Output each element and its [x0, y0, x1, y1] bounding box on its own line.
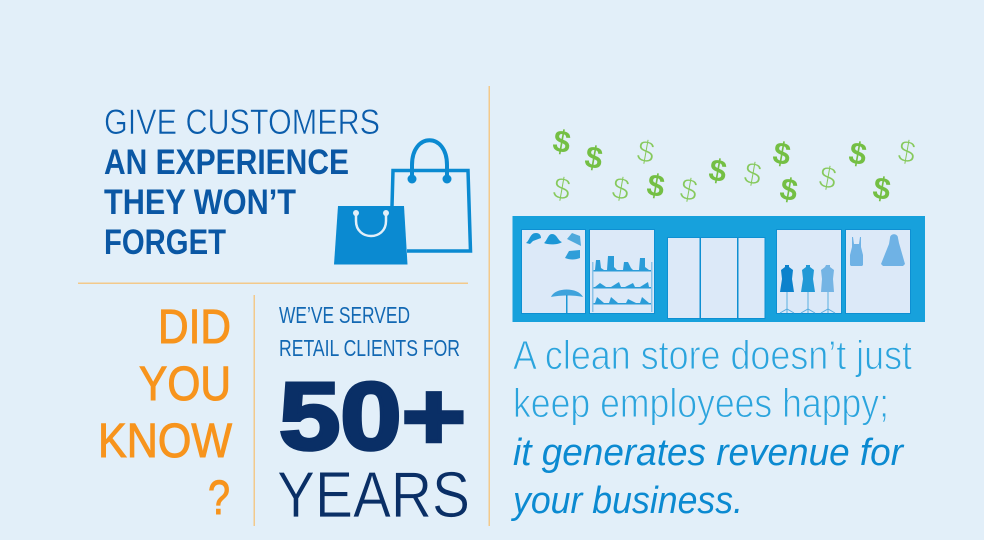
icon: floating dollar signs: [550, 123, 918, 208]
did you know: KNOW: [98, 415, 233, 468]
icon: floating dollar signs: $: [609, 170, 632, 207]
icon: floating dollar signs: $: [777, 171, 800, 208]
heading: give customers: GIVE CUSTOMERS: [104, 103, 380, 142]
did you know: DID: [158, 301, 231, 354]
stat: 50+ years: RETAIL CLIENTS FOR: [279, 335, 460, 361]
icon: floating dollar signs: $: [770, 135, 793, 172]
did you know: YOU: [139, 358, 231, 411]
icon: floating dollar signs: $: [677, 171, 700, 208]
icon: floating dollar signs: $: [582, 139, 605, 176]
storefront: [512, 216, 925, 322]
icon: floating dollar signs: $: [816, 159, 839, 196]
icon: floating dollar signs: $: [634, 133, 657, 170]
icon: floating dollar signs: $: [644, 167, 667, 204]
tagline: it generates revenue for: [513, 432, 904, 474]
icon: hats and umbrella: [526, 233, 583, 313]
tagline: keep employees happy;: [513, 380, 889, 426]
icon: floating dollar signs: $: [870, 170, 893, 207]
icon: shoe shelves: [592, 256, 652, 312]
heading: give customers: AN EXPERIENCE: [104, 143, 349, 182]
did you know: [98, 301, 233, 525]
stat: 50+ years: 50+: [279, 363, 466, 470]
icon: floating dollar signs: $: [550, 123, 573, 160]
icon: floating dollar signs: $: [846, 135, 869, 172]
tagline: [510, 332, 913, 522]
tagline: A clean store doesn’t just: [513, 332, 913, 378]
icon: dresses: [850, 234, 905, 266]
icon: floating dollar signs: $: [895, 133, 918, 170]
icon: shopping bags: [334, 140, 470, 264]
heading: give customers: FORGET: [104, 223, 226, 262]
icon: floating dollar signs: $: [706, 152, 729, 189]
did you know: ?: [208, 472, 230, 525]
tagline: your business.: [510, 480, 743, 522]
stat: 50+ years: YEARS: [277, 458, 470, 531]
stat: 50+ years: WE’VE SERVED: [279, 302, 410, 328]
icon: floating dollar signs: $: [550, 170, 573, 207]
icon: mannequins: [780, 265, 835, 313]
heading: give customers: THEY WON’T: [104, 183, 296, 222]
stat: 50+ years: [277, 302, 470, 531]
icon: floating dollar signs: $: [741, 155, 764, 192]
heading: give customers: [104, 103, 380, 262]
